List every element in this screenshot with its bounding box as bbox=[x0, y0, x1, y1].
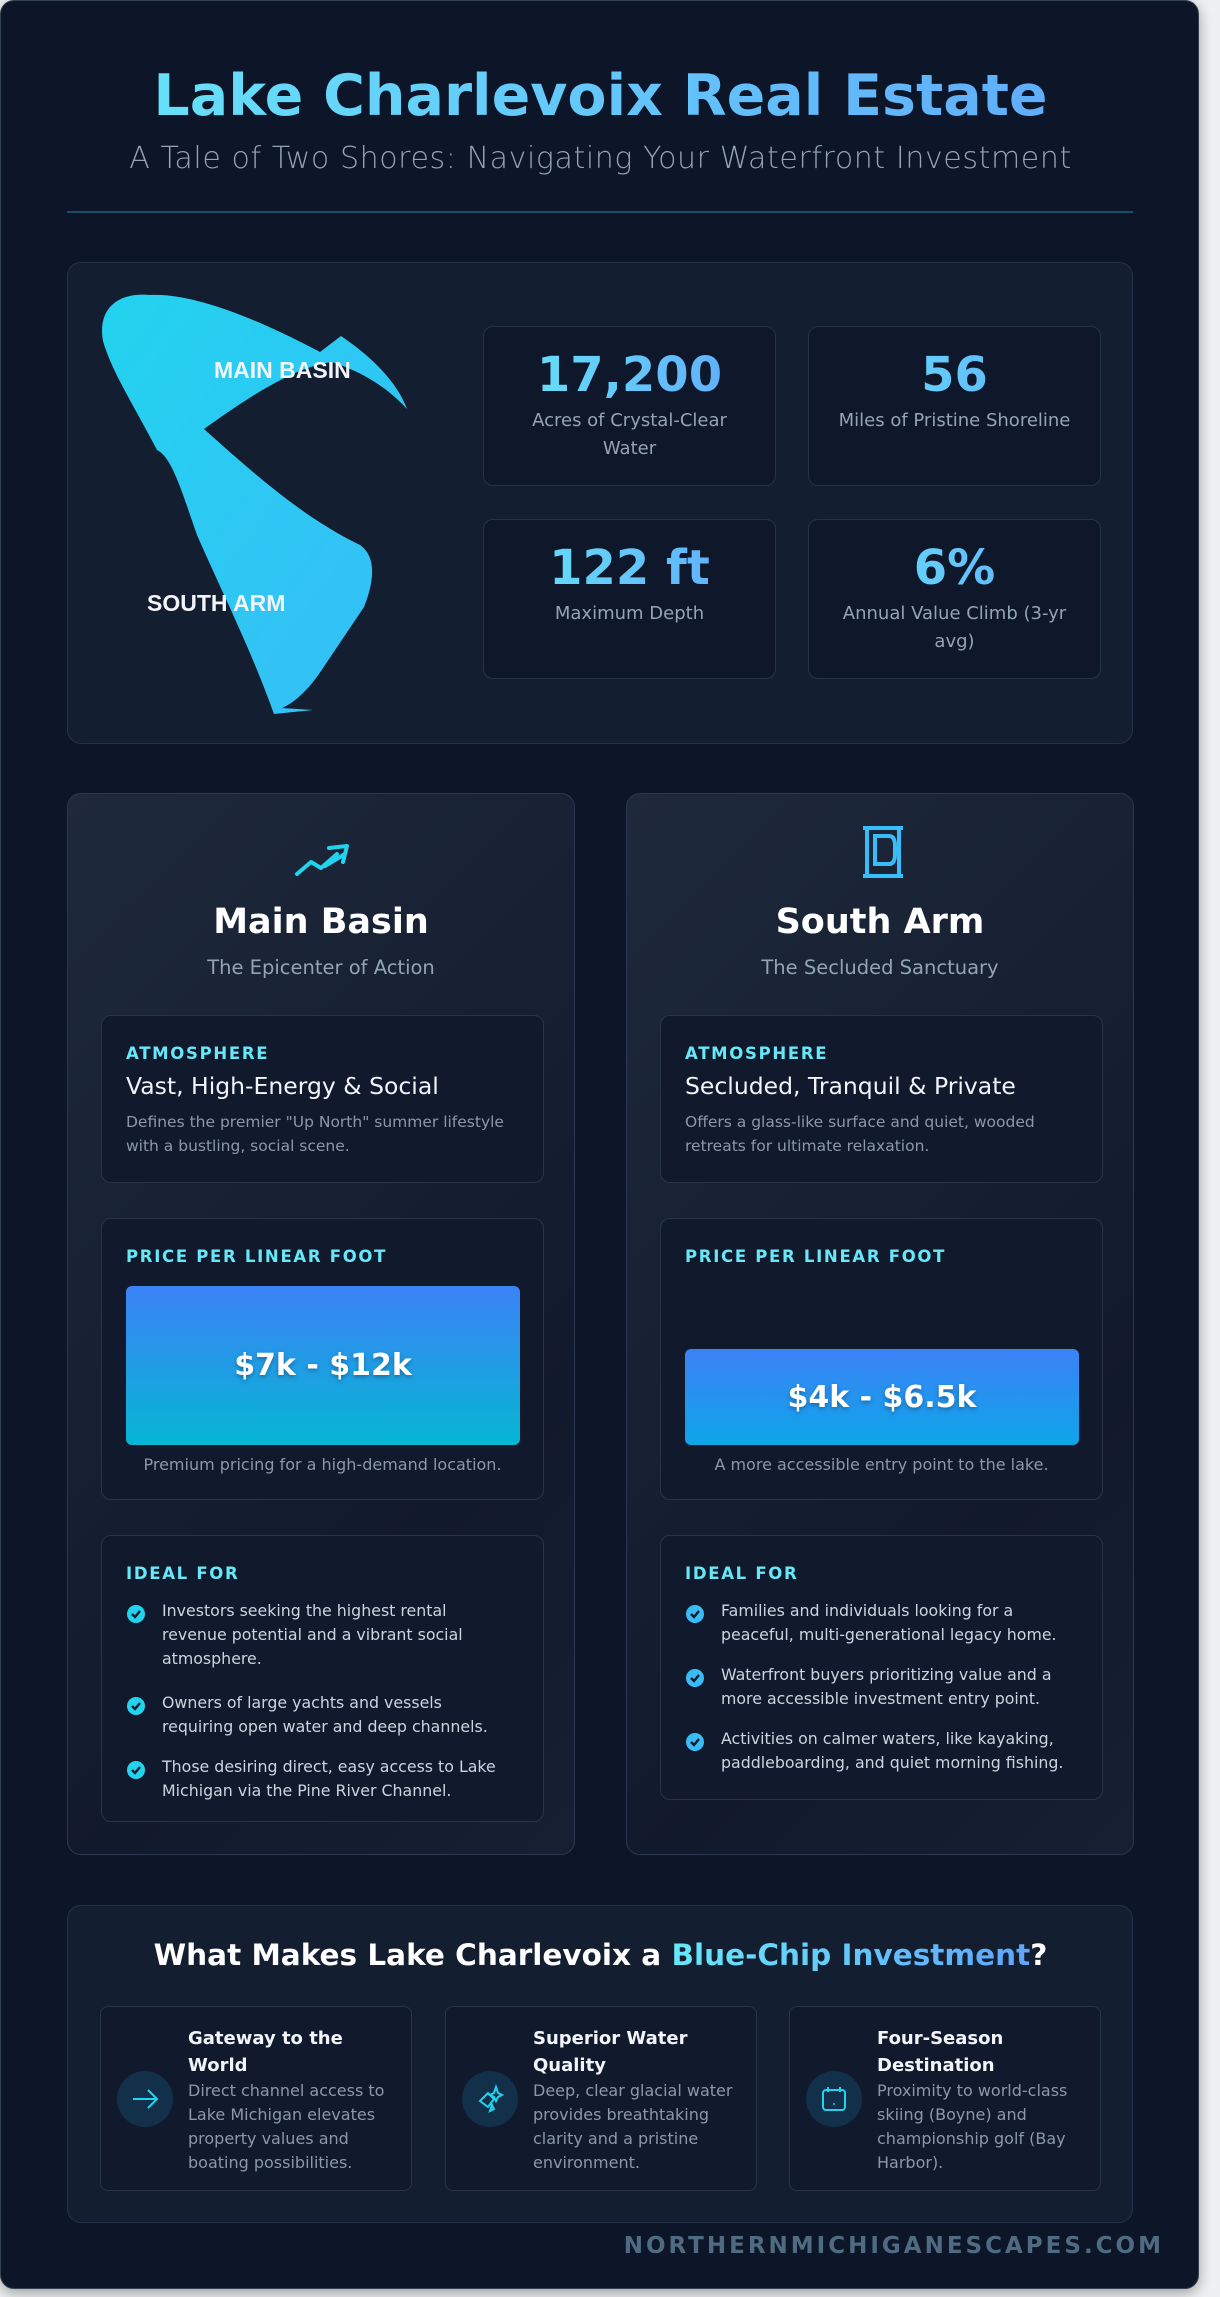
card: gateway bbox=[100, 2006, 412, 2191]
price box bbox=[660, 1218, 1103, 1500]
lake map: MAIN BASIN bbox=[214, 357, 351, 383]
panel: main basin bbox=[67, 793, 575, 1855]
ideal for box: IDEAL FOR bbox=[126, 1564, 239, 1583]
atmosphere box: Secluded, Tranquil & Private bbox=[685, 1072, 1016, 1100]
atmosphere box bbox=[660, 1015, 1103, 1183]
subheading: The Secluded Sanctuary bbox=[761, 956, 999, 979]
price box: A more accessible entry point to the lake. bbox=[714, 1455, 1049, 1474]
stat: depth: Maximum Depth bbox=[555, 603, 704, 624]
footer: NORTHERNMICHIGANESCAPES.COM bbox=[624, 2233, 1164, 2259]
atmosphere box: ATMOSPHERE bbox=[126, 1044, 269, 1063]
price box: $7k - $12k bbox=[234, 1348, 412, 1383]
card: gateway: Direct channel access to Lake Michigan elevates property values and boating possibilities. bbox=[188, 2081, 384, 2172]
stat: value climb: 6% bbox=[914, 540, 995, 596]
ideal for box bbox=[660, 1535, 1103, 1800]
card: gateway: Gateway to the World bbox=[188, 2028, 343, 2076]
ideal for box: Owners of large yachts and vessels requiring open water and deep channels. bbox=[162, 1693, 488, 1736]
card: water: Superior Water Quality bbox=[533, 2028, 687, 2076]
card: four-season: Proximity to world-class skiing (Boyne) and championship golf (Bay Harbor). bbox=[877, 2081, 1067, 2172]
panel: south arm bbox=[626, 793, 1134, 1855]
panel: stats bbox=[67, 262, 1133, 744]
ideal for box: Waterfront buyers prioritizing value and a more accessible investment entry point. bbox=[721, 1665, 1052, 1708]
lake map bbox=[102, 294, 407, 714]
panel: blue-chip bbox=[67, 1905, 1133, 2223]
price box bbox=[101, 1218, 544, 1500]
atmosphere box bbox=[101, 1015, 544, 1183]
price box: PRICE PER LINEAR FOOT bbox=[126, 1247, 387, 1266]
icon: trending bbox=[294, 844, 349, 876]
ideal for box: Investors seeking the highest rental revenue potential and a vibrant social atmosphere. bbox=[162, 1601, 463, 1668]
ideal for box: Activities on calmer waters, like kayaking, paddleboarding, and quiet morning fishing. bbox=[721, 1729, 1063, 1772]
stat: acres: 17,200 bbox=[537, 347, 722, 403]
ideal for box bbox=[101, 1535, 544, 1822]
stat: depth bbox=[483, 519, 776, 679]
heading: Main Basin bbox=[213, 902, 429, 942]
icon: sparkle bbox=[462, 2071, 518, 2127]
icon: arrow bbox=[117, 2071, 173, 2127]
price box: Premium pricing for a high-demand location. bbox=[143, 1455, 502, 1474]
card: four-season: Four-Season Destination bbox=[877, 2028, 1003, 2076]
stat: acres: Acres of Crystal-Clear Water bbox=[532, 410, 727, 459]
ideal for box: Those desiring direct, easy access to Lake Michigan via the Pine River Channel. bbox=[162, 1757, 496, 1800]
atmosphere box: Offers a glass-like surface and quiet, wooded retreats for ultimate relaxation. bbox=[685, 1113, 1035, 1155]
stat: depth: 122 ft bbox=[549, 540, 710, 596]
ideal for box: Families and individuals looking for a peaceful, multi-generational legacy home. bbox=[721, 1601, 1057, 1644]
price box: PRICE PER LINEAR FOOT bbox=[685, 1247, 946, 1266]
stat: value climb bbox=[808, 519, 1101, 679]
stat: shoreline: 56 bbox=[921, 347, 988, 403]
heading: South Arm bbox=[776, 902, 984, 942]
atmosphere box: ATMOSPHERE bbox=[685, 1044, 828, 1063]
stat: acres bbox=[483, 326, 776, 486]
price box: $4k - $6.5k bbox=[787, 1380, 976, 1414]
stat: shoreline bbox=[808, 326, 1101, 486]
title: Lake Charlevoix Real Estate bbox=[153, 63, 1048, 129]
card: water: Deep, clear glacial water provides breathtaking clarity and a pristine environment. bbox=[533, 2081, 732, 2172]
subheading: The Epicenter of Action bbox=[207, 956, 435, 979]
card: four-season bbox=[789, 2006, 1101, 2191]
card: water bbox=[445, 2006, 757, 2191]
title bbox=[1, 59, 1200, 133]
ideal for box: IDEAL FOR bbox=[685, 1564, 798, 1583]
blue-chip heading: What Makes Lake Charlevoix a Blue-Chip Investment? bbox=[154, 1938, 1047, 1972]
subtitle: A Tale of Two Shores: Navigating Your Waterfront Investment bbox=[129, 141, 1072, 176]
atmosphere box: Defines the premier "Up North" summer lifestyle with a bustling, social scene. bbox=[126, 1113, 504, 1155]
atmosphere box: Vast, High-Energy & Social bbox=[126, 1072, 439, 1100]
stat: shoreline: Miles of Pristine Shoreline bbox=[839, 410, 1070, 431]
lake map: SOUTH ARM bbox=[147, 590, 285, 616]
stat: value climb: Annual Value Climb (3-yr avg) bbox=[843, 603, 1066, 652]
icon: calendar bbox=[806, 2071, 862, 2127]
icon: frame bbox=[863, 826, 903, 878]
